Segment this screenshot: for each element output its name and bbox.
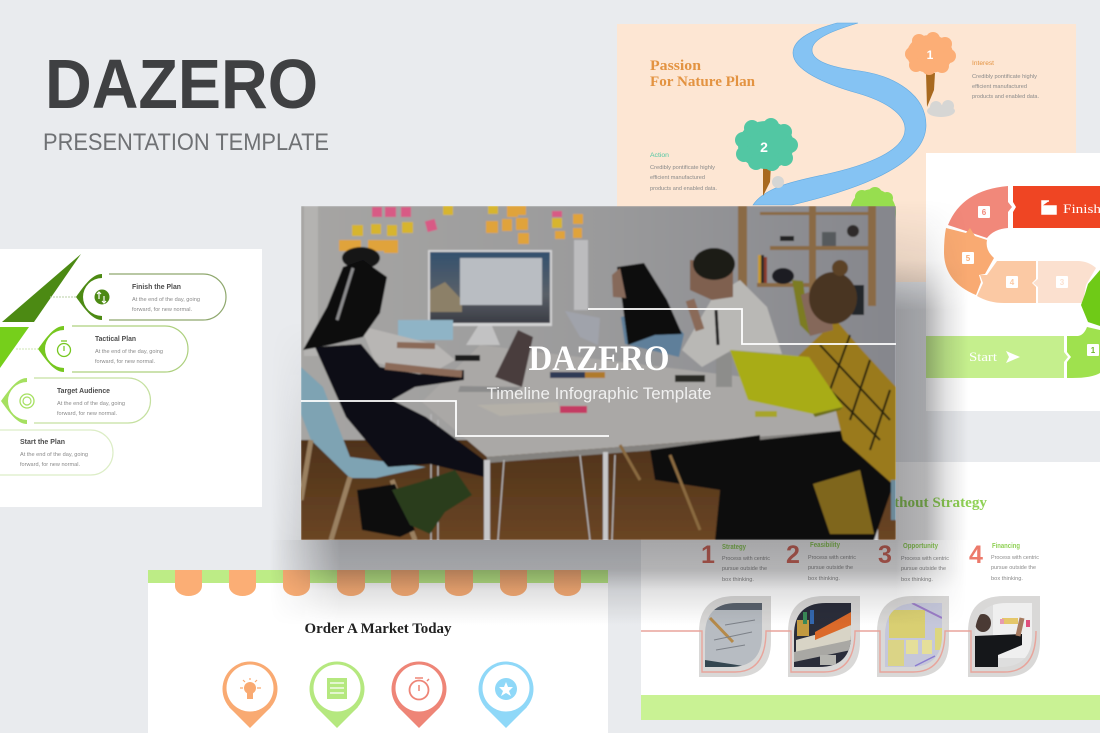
pin: stopwatch: [392, 662, 446, 728]
icon: dark green triangle: [2, 254, 81, 322]
leaf frames: [699, 596, 1040, 677]
leaf photo 1: sketch notes: [705, 603, 762, 667]
step text 4: box thinking.: [991, 576, 1023, 582]
heading: passion for nature plan: For Nature Plan: [650, 74, 756, 90]
segment 6: [948, 186, 1012, 238]
title: [43, 45, 329, 156]
step text 2: pursue outside the: [808, 565, 853, 571]
step text 1: [701, 541, 770, 583]
step: tactical plan: forward, for new normal.: [95, 359, 155, 365]
table: [424, 346, 841, 458]
people under table: [650, 435, 760, 540]
pin: notes: [310, 662, 364, 728]
step text 2: box thinking.: [808, 576, 840, 582]
step: finish the plan: Finish the Plan: [132, 284, 181, 291]
step text 1: Process with centric: [722, 556, 770, 562]
leaf photo 4: man at whiteboard: [975, 603, 1032, 667]
heading: order a market today: Order A Market Today: [304, 621, 452, 637]
segment 5: 5: [966, 254, 971, 263]
woman in plaid: [758, 430, 892, 540]
step: tactical plan: [38, 326, 188, 372]
step text 3: 3: [878, 541, 892, 569]
text: interest: Interest: [972, 60, 994, 67]
panel: order a market today: [148, 570, 608, 733]
woman in denim: [620, 316, 684, 358]
pin: idea: [222, 662, 278, 728]
panel: game path: [926, 153, 1100, 411]
tree 2: action: [735, 118, 798, 196]
step: start the plan: At the end of the day, going: [20, 452, 88, 458]
plant: [392, 470, 472, 534]
heading: passion for nature plan: [650, 58, 756, 90]
photo scene: [301, 206, 896, 540]
segment 5: [944, 228, 994, 295]
step text 4: [969, 541, 1039, 582]
panel: strategy steps: [641, 462, 1100, 720]
photo title: dazero: DAZERO: [528, 338, 670, 378]
step text 4: pursue outside the: [991, 565, 1036, 571]
step: finish the plan: forward, for new normal.: [132, 307, 192, 313]
step: start the plan: [0, 430, 113, 475]
step text 1: 1: [701, 541, 715, 569]
river: [753, 23, 926, 205]
photo lines: [301, 309, 896, 436]
step: target audience: At the end of the day, going: [57, 401, 125, 407]
text: interest: products and enabled data.: [972, 94, 1039, 100]
segment 6: 6: [982, 208, 987, 217]
text: action: Action: [650, 152, 669, 159]
text: action: efficient manufactured: [650, 175, 705, 181]
text: action: Credibly pontificate highly: [650, 165, 715, 171]
heading: passion for nature plan: Passion: [650, 58, 702, 74]
step: target audience: Target Audience: [57, 388, 110, 395]
step text 4: Financing: [992, 543, 1020, 550]
segment 2: [1081, 270, 1100, 326]
step text 2: Process with centric: [808, 555, 856, 561]
tree 2: action: 2: [760, 139, 768, 155]
step text 2: Feasibility: [810, 542, 840, 549]
step text 4: Process with centric: [991, 555, 1039, 561]
man in white shirt: [682, 280, 782, 367]
step text 4: 4: [969, 541, 983, 569]
text: action: [650, 152, 717, 192]
step text 3: box thinking.: [901, 577, 933, 583]
step: start the plan: Start the Plan: [20, 439, 65, 446]
person behind left: [342, 247, 380, 269]
panel: passion for nature plan: [617, 23, 1076, 282]
timeline line: [641, 631, 1036, 672]
step: tactical plan: At the end of the day, going: [95, 349, 163, 355]
segment 3: 3: [1060, 278, 1065, 287]
bookshelf: [738, 206, 876, 316]
finish block: [1013, 186, 1100, 228]
laptop yellow: [730, 350, 843, 414]
tree 1: interest: [905, 32, 956, 117]
step: start the plan: forward, for new normal.: [20, 462, 80, 468]
step text 3: Opportunity: [903, 543, 938, 550]
step text 1: pursue outside the: [722, 566, 767, 572]
step text 2: 2: [786, 541, 800, 569]
start block: Start: [969, 349, 997, 364]
panel: plan steps: [0, 249, 262, 507]
leaf photo 2: stationery drawer: [794, 603, 851, 667]
segment 1: [1067, 327, 1100, 378]
tree 1: interest: 1: [927, 48, 934, 62]
monitor: [428, 250, 552, 326]
awning strip: [148, 570, 608, 596]
start block: [926, 336, 1068, 378]
pin: star: [478, 662, 534, 728]
shadow: main photo: [276, 223, 962, 616]
finish block: Finish: [1063, 201, 1100, 216]
step: finish the plan: [76, 274, 226, 320]
chair: [301, 367, 426, 478]
step: finish the plan: At the end of the day, going: [132, 297, 200, 303]
icon: light green triangle: [0, 327, 29, 368]
step text 1: box thinking.: [722, 577, 754, 583]
tree 3: green crown: [850, 187, 896, 235]
laptop dark: [495, 330, 533, 387]
panel: main photo cover: [301, 206, 896, 540]
text: interest: efficient manufactured: [972, 84, 1027, 90]
segment 4: [977, 261, 1036, 303]
table legs: [482, 451, 880, 540]
subheading: presentation template: PRESENTATION TEMPLATE: [43, 129, 329, 156]
segment 3: [1033, 261, 1096, 303]
step: target audience: [1, 378, 150, 424]
text: interest: [972, 60, 1039, 100]
step text 3: [878, 541, 949, 583]
step text 2: [786, 541, 856, 582]
step text 3: pursue outside the: [901, 566, 946, 572]
step: target audience: forward, for new normal.: [57, 411, 117, 417]
segment 4: 4: [1010, 278, 1015, 287]
text: action: products and enabled data.: [650, 186, 717, 192]
heading: strategy: Without Strategy: [875, 495, 987, 511]
step: tactical plan: Tactical Plan: [95, 336, 136, 343]
woman at left: [315, 344, 484, 477]
notebook and pink note: [482, 403, 559, 415]
step text 3: Process with centric: [901, 556, 949, 562]
laptop back and items: [565, 311, 600, 345]
photo subtitle: Timeline Infographic Template: [486, 384, 712, 403]
step text 1: Strategy: [722, 544, 746, 551]
heading: DAZERO: DAZERO: [45, 45, 318, 123]
text: interest: Credibly pontificate highly: [972, 74, 1037, 80]
leaf photo 3: sticky note board: [885, 603, 942, 667]
segment 1: 1: [1091, 346, 1096, 355]
